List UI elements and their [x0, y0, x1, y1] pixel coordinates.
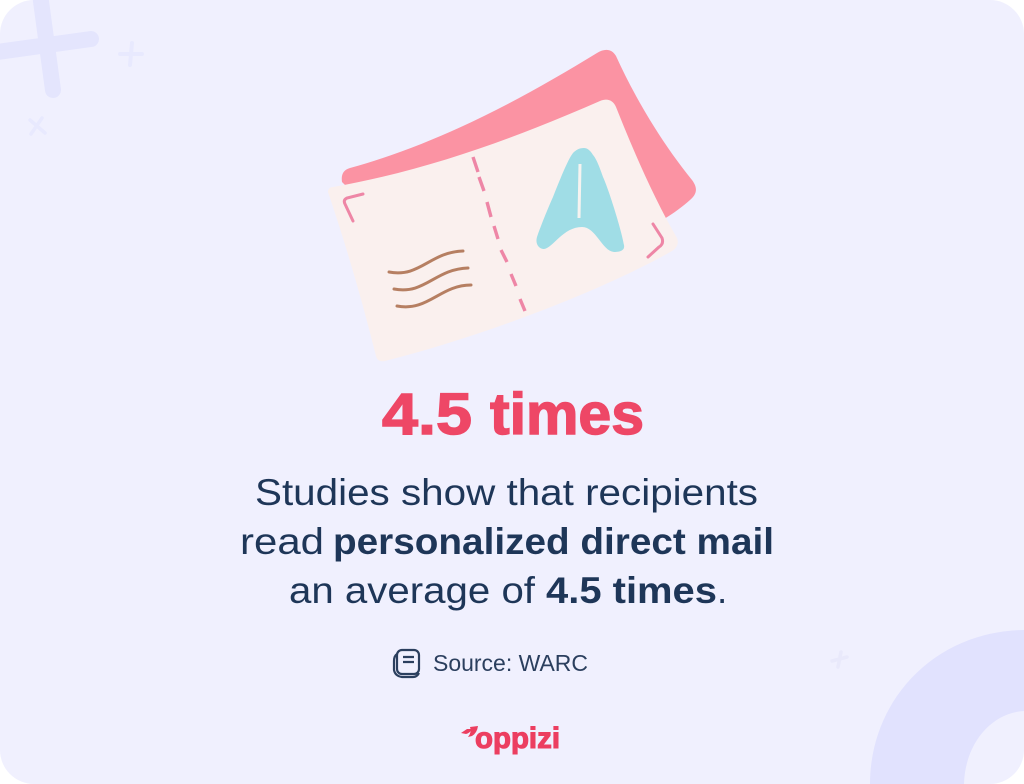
body text: an average of	[289, 570, 536, 611]
logo wordmark: oppizi	[475, 722, 560, 755]
icon: notebook	[394, 650, 419, 677]
headline: 4.5	[382, 382, 472, 447]
decoration: faint plus	[832, 652, 847, 667]
postmark waves	[389, 251, 471, 307]
dashed divider	[473, 157, 525, 311]
illustration: postcards	[328, 50, 696, 361]
body text: Studies show that recipients	[255, 472, 758, 513]
decoration: corner ring	[870, 630, 1024, 784]
source text: Source: WARC	[433, 650, 588, 676]
postcard front	[328, 100, 678, 361]
stamp: white line	[579, 164, 580, 218]
body text	[240, 472, 774, 611]
decoration: small plus	[120, 43, 142, 65]
corner mark bottom right	[648, 224, 663, 257]
logo: oppizi	[461, 722, 560, 755]
postcard back	[342, 50, 696, 240]
headline: times	[490, 382, 644, 447]
decoration: large plus	[0, 0, 91, 90]
stamp: blue arrow	[536, 148, 624, 252]
body text: .	[717, 570, 727, 611]
body text: personalized direct mail	[333, 521, 774, 562]
body text: 4.5 times	[546, 570, 717, 611]
logo mark	[461, 726, 478, 737]
source line	[394, 650, 588, 677]
corner mark top left	[344, 194, 363, 221]
headline	[382, 382, 644, 447]
body text: read	[240, 521, 324, 562]
decoration: small cross	[35, 124, 36, 125]
